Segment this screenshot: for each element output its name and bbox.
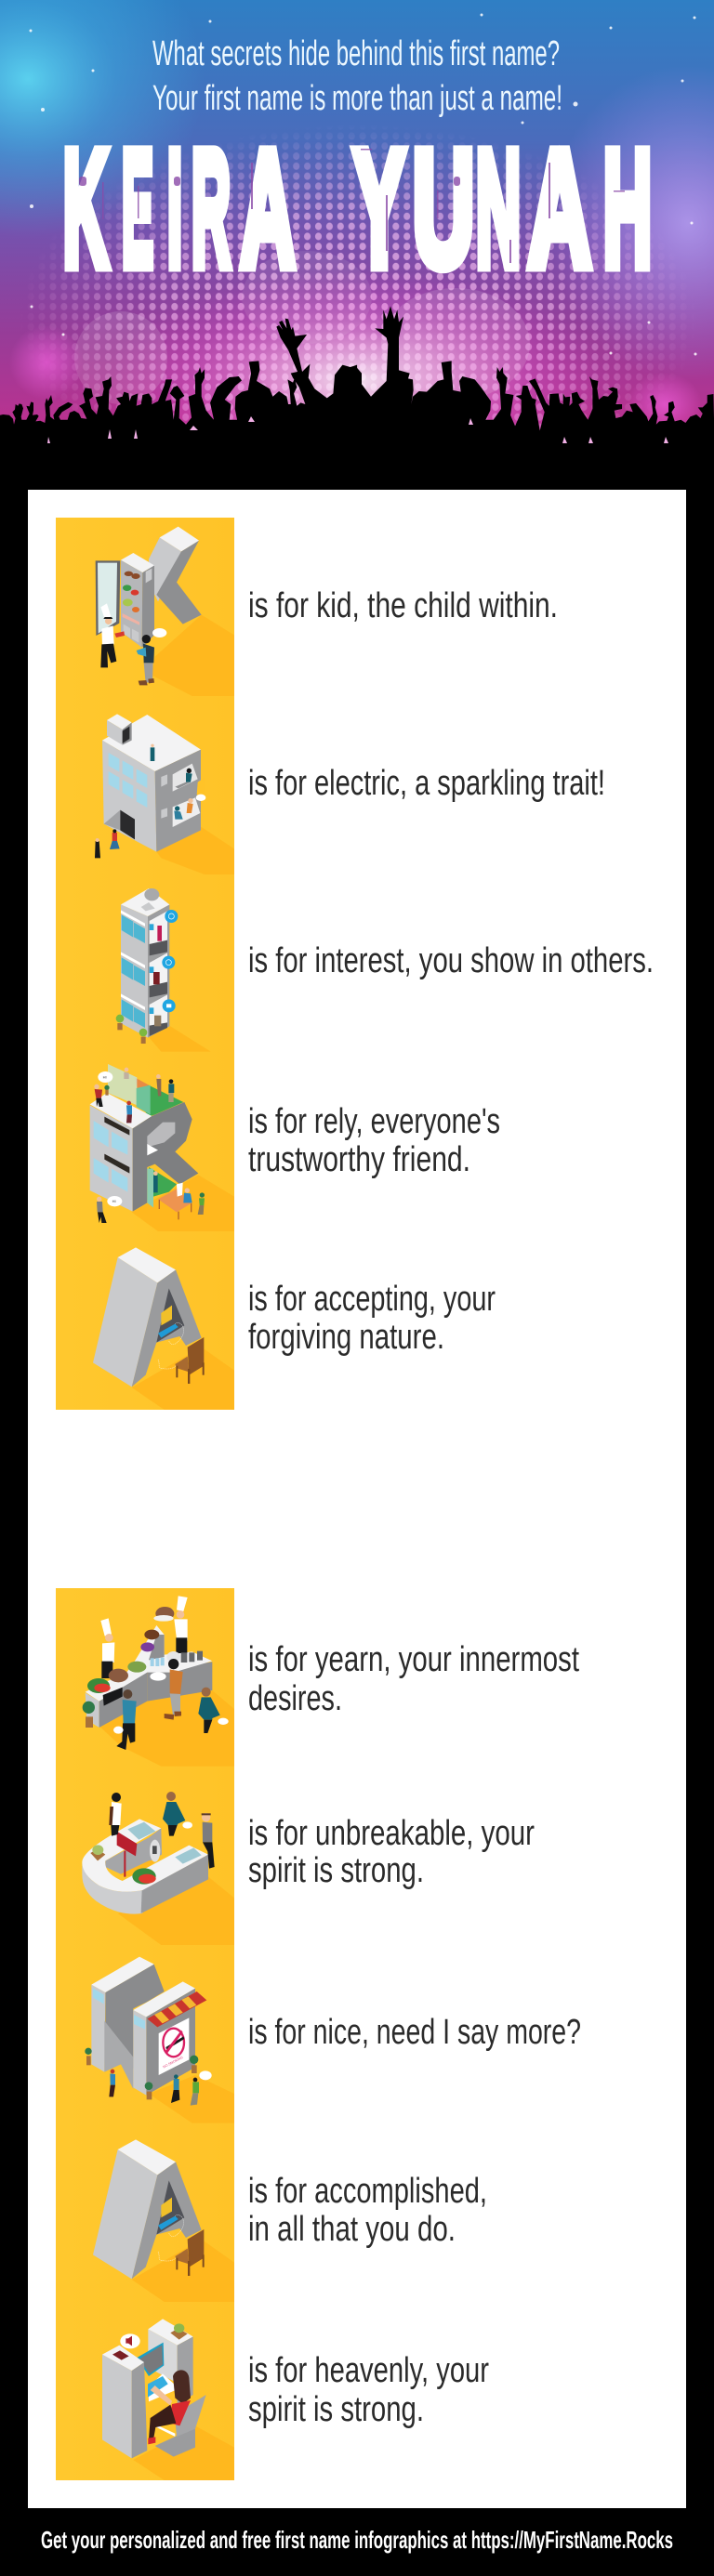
caption H: spirit is strong. (248, 2390, 424, 2429)
letter tile: N awning: NO SMOKING (163, 2056, 184, 2070)
yellow column 1 (56, 518, 234, 1410)
letter tile: R office (90, 1064, 234, 1231)
title: name: R (192, 116, 231, 300)
letter tile: K fridge (96, 527, 234, 696)
white content panel (28, 490, 686, 2508)
letter tile: N awning (85, 1957, 234, 2123)
title: name: A (528, 117, 591, 299)
caption U: is for unbreakable, your (248, 1814, 535, 1853)
caption U: spirit is strong. (248, 1851, 424, 1890)
title: name: H (603, 116, 652, 300)
caption R: trustworthy friend. (248, 1140, 470, 1179)
caption K: is for kid, the child within. (248, 586, 558, 625)
caption E: is for electric, a sparkling trait! (248, 764, 605, 803)
caption A (248, 1280, 496, 1357)
title: name: U (413, 117, 474, 300)
yellow column 2 (56, 1588, 234, 2480)
letter tile: A chair repeated (93, 2139, 234, 2302)
crowd silhouette (0, 306, 714, 493)
title: name: N (476, 117, 521, 300)
title: name: Y (353, 119, 405, 300)
intro text (152, 34, 562, 118)
caption R (248, 1102, 500, 1179)
caption U (248, 1814, 535, 1890)
caption N: is for nice, need I say more? (248, 2013, 581, 2052)
header banner: concert background (0, 0, 714, 431)
letter tile: R office: HI (112, 1199, 116, 1203)
caption Y (248, 1640, 579, 1718)
letter tile: H desk (102, 2319, 234, 2480)
caption A2: is for accomplished, (248, 2172, 487, 2211)
letter tile: E building (95, 714, 234, 874)
caption A2: in all that you do. (248, 2210, 456, 2249)
letter tile: U counter (82, 1792, 234, 1945)
caption H: is for heavenly, your (248, 2351, 489, 2390)
letter tile: Y buffet (83, 1596, 234, 1767)
letter tile: I tower (116, 888, 211, 1052)
caption Y: desires. (248, 1679, 342, 1718)
caption H (248, 2351, 489, 2429)
caption A: forgiving nature. (248, 1318, 444, 1357)
caption A: is for accepting, your (248, 1280, 496, 1319)
letter tile: R office: HI (103, 1074, 107, 1079)
title: name: I (167, 116, 182, 300)
caption Y: is for yearn, your innermost (248, 1640, 579, 1679)
title: name: K (63, 117, 108, 300)
caption R: is for rely, everyone's (248, 1102, 500, 1141)
letter tile: A chair (93, 1247, 234, 1410)
caption A2 (248, 2172, 487, 2249)
title: name (63, 116, 652, 301)
title: name: A (241, 118, 295, 301)
title: name: E (122, 118, 153, 300)
